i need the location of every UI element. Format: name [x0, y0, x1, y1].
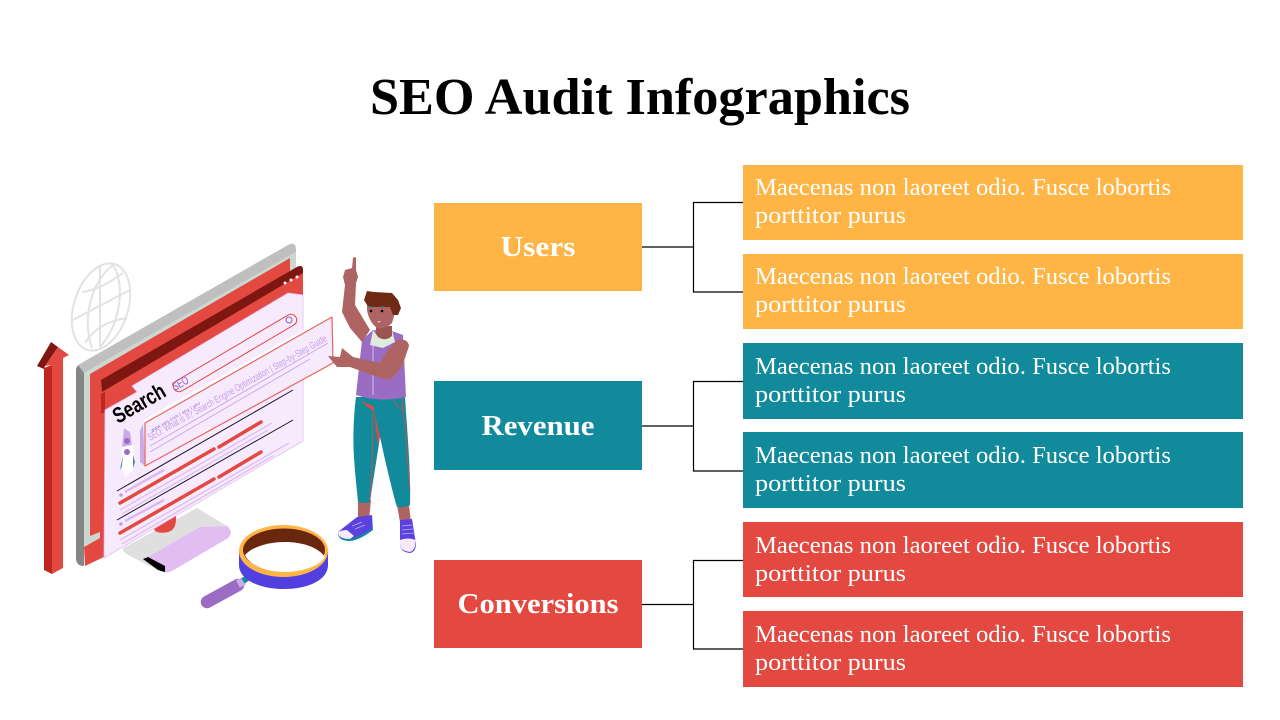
panel: users: Users — [500, 231, 576, 263]
panel: revenue: Revenue — [482, 410, 595, 442]
icon: rising arrow — [37, 342, 69, 574]
torso — [356, 330, 406, 400]
text box: conversions 1 — [743, 522, 1243, 597]
panel: users — [434, 203, 642, 291]
shoes — [338, 515, 416, 553]
search field: SEO — [170, 373, 191, 394]
result rows — [117, 390, 293, 544]
text box: users 1 — [743, 165, 1243, 240]
text box: revenue 1: Maecenas non laoreet odio. Fusce lobortis — [755, 353, 1171, 380]
collar — [370, 330, 395, 348]
icon: magnifying glass — [207, 525, 328, 602]
text box: revenue 1 — [743, 343, 1243, 419]
text box: conversions 1: Maecenas non laoreet odio. Fusce lobortis — [755, 532, 1171, 559]
text box: conversions 2: porttitor purus — [755, 649, 906, 676]
text box: conversions 1: porttitor purus — [755, 560, 906, 587]
connector: conversions — [642, 560, 745, 649]
icon: rocket — [120, 427, 135, 477]
text box: users 2 — [743, 254, 1243, 329]
title: SEO Audit Infographics — [370, 69, 910, 126]
browser window — [101, 266, 303, 558]
connector: revenue — [642, 382, 745, 471]
floating search result card: SEO: What is It? Search Engine Optimization | Step-by-Step Guide — [146, 333, 329, 444]
panel: conversions: Conversions — [458, 588, 618, 620]
text box: users 1: Maecenas non laoreet odio. Fusce lobortis — [755, 174, 1171, 201]
illustration: SEO search monitor with person — [37, 244, 416, 602]
pointing arm — [328, 340, 409, 379]
panel: revenue — [434, 381, 642, 470]
text box: revenue 1: porttitor purus — [755, 381, 906, 408]
floating search result card: www.seo.com | seo | seo — [150, 400, 201, 433]
head — [364, 291, 401, 342]
text box: conversions 2 — [743, 611, 1243, 687]
monitor stand — [123, 508, 231, 572]
text box: revenue 2 — [743, 432, 1243, 508]
legs — [353, 397, 411, 522]
text box: revenue 2: porttitor purus — [755, 470, 906, 497]
icon: globe — [61, 256, 141, 358]
connector: users — [642, 202, 745, 292]
floating search result card — [140, 315, 333, 466]
text box: revenue 2: Maecenas non laoreet odio. Fusce lobortis — [755, 442, 1171, 469]
search field — [170, 317, 292, 394]
text box: users 2: Maecenas non laoreet odio. Fusce lobortis — [755, 263, 1171, 290]
raised arm — [342, 257, 370, 342]
person pointing up — [328, 257, 416, 553]
text box: conversions 2: Maecenas non laoreet odio. Fusce lobortis — [755, 621, 1171, 648]
panel: conversions — [434, 560, 642, 648]
monitor — [76, 244, 303, 566]
search label: Search — [108, 378, 170, 428]
text box: users 2: porttitor purus — [755, 291, 906, 318]
text box: users 1: porttitor purus — [755, 202, 906, 229]
